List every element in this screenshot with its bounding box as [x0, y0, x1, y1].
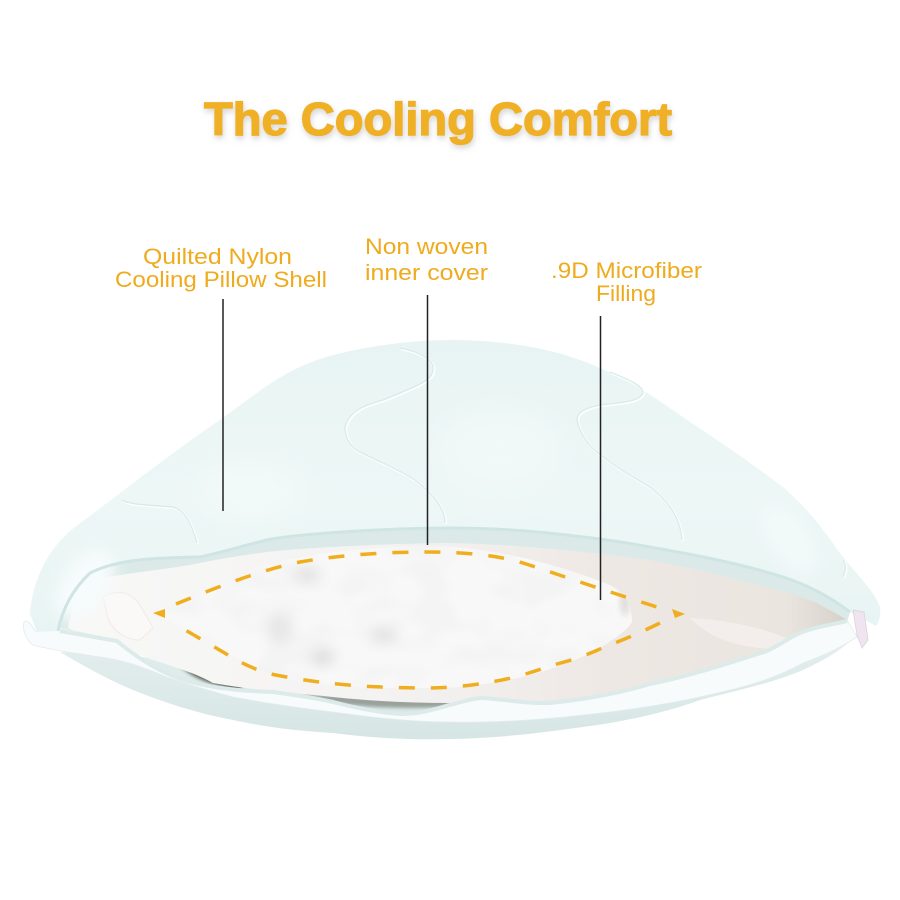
opening interior shadow — [60, 528, 850, 683]
label: quilted nylon shell — [115, 244, 327, 292]
label: non woven inner cover — [365, 234, 488, 285]
pillow illustration — [23, 340, 880, 739]
dark gap left — [180, 660, 250, 690]
filling cloud shading — [266, 566, 630, 667]
leader line: inner cover — [426, 295, 428, 545]
label: quilted nylon shell: Cooling Pillow Shell — [115, 267, 327, 292]
dashed arrow tip left — [153, 609, 165, 618]
title: The Cooling Comfort — [204, 93, 672, 145]
lower pillow body — [60, 634, 857, 739]
label: microfiber filling — [551, 258, 702, 306]
leader line: shell — [222, 299, 224, 511]
cover right fold — [690, 618, 795, 649]
quilted shell top — [30, 340, 880, 632]
zipper pull — [853, 610, 868, 648]
label: quilted nylon shell: Quilted Nylon — [143, 244, 292, 269]
label: microfiber filling: .9D Microfiber — [551, 258, 702, 283]
label: microfiber filling: Filling — [596, 281, 656, 306]
dashed arrow tip right — [672, 609, 685, 618]
zipper teeth strip — [60, 621, 847, 714]
cover fold — [103, 592, 153, 640]
label: non woven inner cover: inner cover — [365, 260, 488, 285]
leader line: filling — [600, 316, 602, 600]
lower white zipper band — [23, 620, 857, 722]
inner cover — [68, 543, 847, 703]
label: non woven inner cover: Non woven — [365, 234, 488, 259]
shell highlights — [42, 410, 829, 632]
quilting stitches — [122, 348, 846, 578]
dark gap middle — [300, 695, 470, 708]
shell zipper piping — [58, 528, 850, 631]
microfiber filling — [155, 546, 632, 688]
dashed outline of filling — [176, 552, 660, 688]
